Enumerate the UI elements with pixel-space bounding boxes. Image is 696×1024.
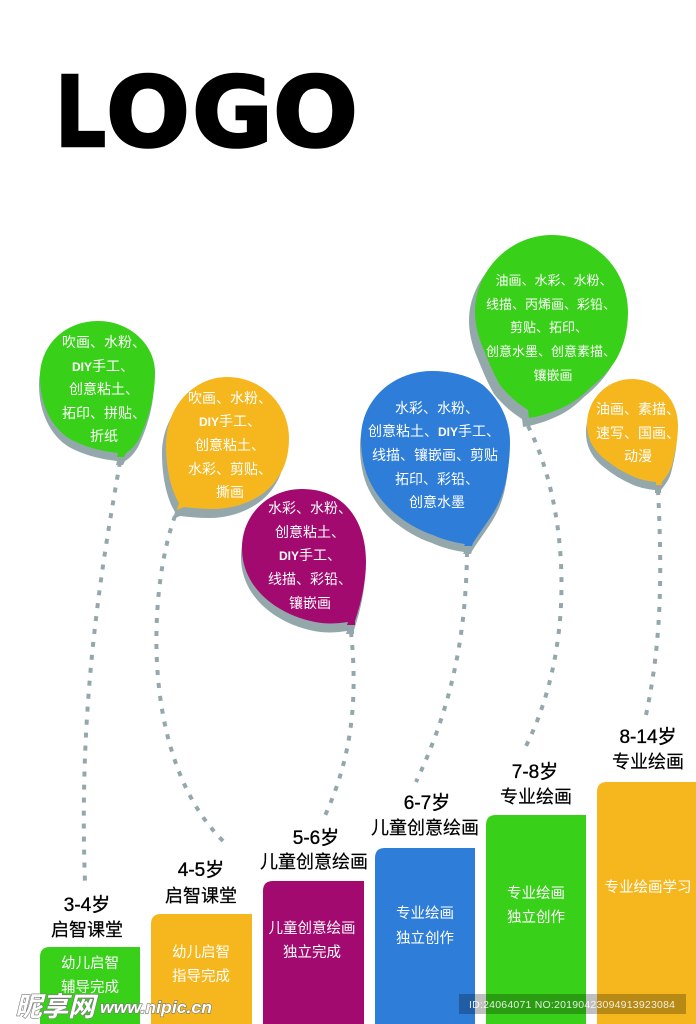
balloon text: 撕画 [216, 484, 244, 500]
bar text [61, 955, 119, 996]
balloon shadow [162, 386, 285, 519]
dashed string: balloon 5 [525, 426, 561, 748]
balloon body [361, 371, 510, 546]
bar text [396, 905, 454, 947]
course label: 专业绘画 [612, 752, 684, 772]
balloon text: 水彩、水粉、 [268, 500, 352, 516]
balloon text: 油画、水彩、水粉、 [495, 273, 613, 288]
balloon text: 创意粘土、 [275, 524, 345, 540]
balloon text: 动漫 [624, 448, 652, 464]
balloon body [40, 321, 155, 457]
dashed string: balloon 6 [646, 490, 660, 715]
bar [151, 914, 252, 1024]
balloon body [242, 489, 366, 625]
balloon text: 创意水墨、创意素描、 [486, 344, 616, 359]
balloon text [188, 390, 272, 500]
balloon text [268, 500, 352, 611]
balloon text: DIY手工、 [72, 358, 134, 374]
balloon text: DIY手工、 [199, 413, 261, 429]
balloon text: 线描、丙烯画、彩铅、 [486, 297, 616, 312]
balloon text: 创意粘土、DIY手工、 [368, 423, 500, 439]
course label: 专业绘画 [500, 787, 572, 807]
bar text: 儿童创意绘画 [268, 919, 356, 937]
bar [486, 815, 586, 1024]
bar text [268, 919, 356, 961]
column: 8-14岁 [597, 726, 696, 1024]
title: LOGO: O [106, 56, 190, 169]
title: LOGO: L [55, 56, 106, 169]
balloon shadow [39, 329, 154, 465]
bar [597, 782, 696, 1024]
balloon: orange 4-5 [162, 377, 289, 519]
bar text: 独立创作 [507, 909, 565, 926]
bar text: 幼儿启智 [172, 944, 230, 961]
balloon shadow [241, 498, 365, 634]
balloon: green 3-4 [39, 321, 155, 465]
column: 6-7岁 [371, 792, 479, 1024]
balloon text [368, 400, 500, 510]
balloon: orange 8-14 [586, 379, 680, 493]
course label: 启智课堂 [165, 886, 237, 906]
title: LOGO [55, 56, 358, 169]
bar [375, 848, 475, 1024]
bar text: 幼儿启智 [61, 955, 119, 972]
age label: 8-14岁 [619, 726, 677, 748]
watermark: id bar [459, 994, 686, 1014]
balloon text: 创意水墨 [409, 494, 465, 510]
balloon text: 拓印、拼贴、 [62, 405, 146, 421]
course label: 儿童创意绘画 [371, 818, 479, 838]
bar text [507, 885, 565, 926]
column: 3-4岁 [40, 894, 140, 1024]
dashed string: balloon 2 [156, 516, 224, 842]
balloon text: 线描、彩铅、 [268, 571, 352, 587]
balloon text [596, 401, 680, 464]
bar text: 独立完成 [283, 944, 341, 961]
bar [263, 881, 364, 1024]
age label: 6-7岁 [404, 792, 450, 814]
column: 5-6岁 [260, 827, 368, 1024]
balloon text [62, 334, 146, 444]
balloon text: 水彩、水粉、 [395, 400, 479, 416]
balloon text: 拓印、彩铅、 [395, 471, 479, 487]
balloon shadow [469, 244, 622, 427]
watermark: site name [15, 992, 212, 1022]
balloon text: 镶嵌画 [533, 368, 573, 383]
watermark: site name: 昵享网 [15, 992, 99, 1022]
watermark: id bar: ID:24064071 NO:20190423094913923084 [469, 999, 675, 1011]
age label: 7-8岁 [512, 761, 558, 783]
title: LOGO: O [273, 56, 358, 169]
watermark: site name: www.nipic.cn [100, 998, 212, 1017]
balloon text [486, 273, 616, 383]
bar text: 专业绘画 [507, 885, 565, 902]
bar text [172, 944, 230, 985]
dashed string: balloon 1 [84, 462, 120, 882]
dashed string: balloon 4 [416, 552, 467, 782]
balloon body [587, 379, 678, 485]
bar text: 专业绘画 [396, 905, 454, 922]
balloon body [166, 377, 289, 510]
age label: 3-4岁 [64, 894, 110, 916]
bar text: 专业绘画学习 [604, 879, 692, 896]
bar text: 独立创作 [396, 930, 454, 947]
course label: 儿童创意绘画 [260, 852, 368, 872]
age label: 4-5岁 [178, 859, 224, 881]
balloon text: 吹画、水粉、 [62, 334, 146, 350]
bar text: 指导完成 [172, 968, 230, 985]
balloon text: 创意粘土、 [195, 437, 265, 453]
balloon text: 速写、国画、 [596, 425, 680, 441]
balloon text: 剪贴、拓印、 [510, 320, 588, 335]
age label: 5-6岁 [293, 827, 339, 849]
balloon text: 吹画、水粉、 [188, 390, 272, 406]
balloon body [475, 235, 628, 418]
course label: 启智课堂 [51, 920, 123, 940]
balloon: purple 5-6 [241, 489, 366, 634]
balloon text: 创意粘土、 [69, 381, 139, 397]
balloon shadow [586, 387, 677, 493]
balloon text: 油画、素描、 [596, 401, 680, 417]
column: 7-8岁 [486, 761, 586, 1024]
dashed string: balloon 3 [322, 632, 354, 822]
balloon: green 7-8 [469, 235, 628, 427]
column: 4-5岁 [151, 859, 252, 1024]
balloon: blue 6-7 [360, 371, 510, 554]
bar text: 辅导完成 [61, 979, 119, 996]
balloon text: 线描、镶嵌画、剪贴 [372, 447, 498, 463]
balloon text: 水彩、剪贴、 [188, 461, 272, 477]
balloon shadow [360, 379, 509, 554]
balloon text: DIY手工、 [279, 547, 341, 563]
bar [40, 947, 140, 1024]
balloon text: 镶嵌画 [289, 595, 331, 611]
balloon text: 折纸 [90, 428, 118, 444]
title: LOGO: G [192, 56, 273, 169]
